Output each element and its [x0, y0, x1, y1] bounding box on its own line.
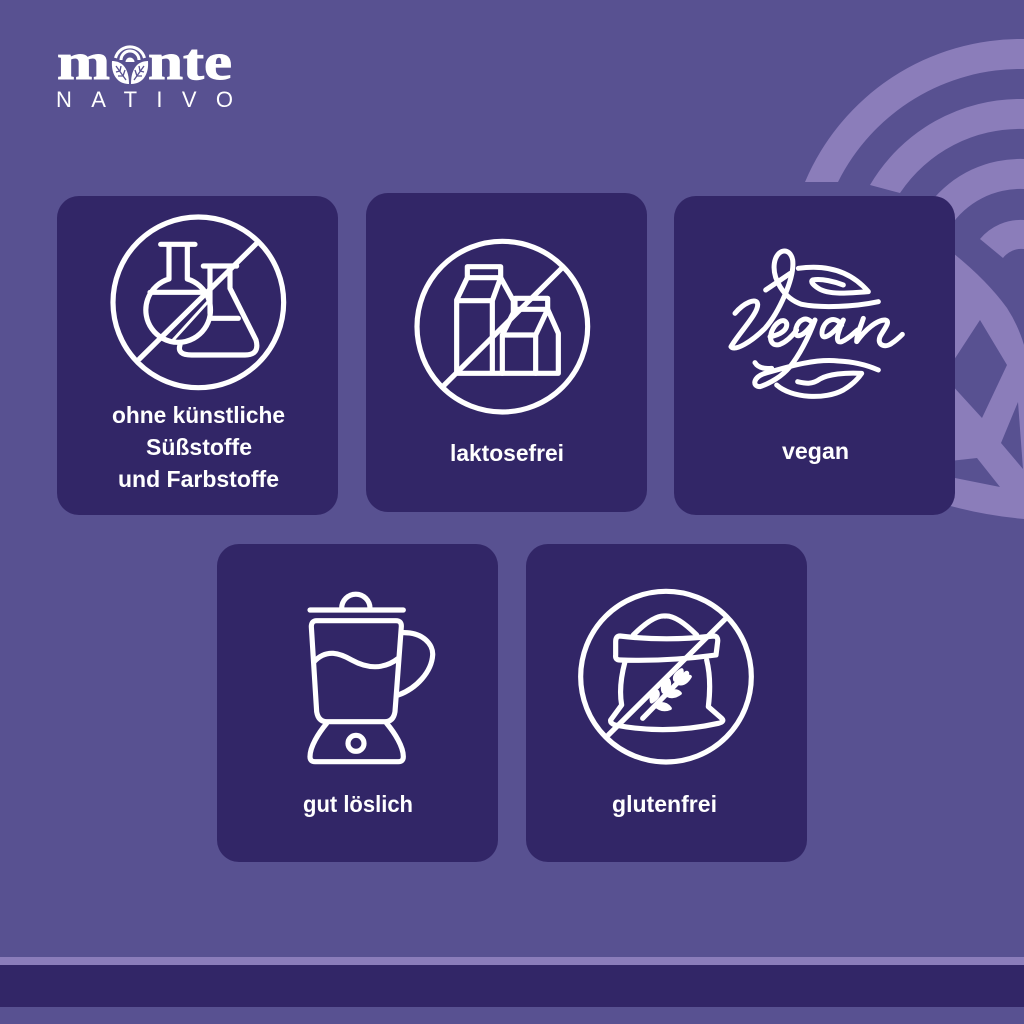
- panel: glutenfrei: [526, 544, 807, 862]
- panel: vegan: [674, 196, 955, 515]
- label: laktosefrei: laktosefrei: [450, 440, 564, 466]
- panel background: [366, 193, 647, 512]
- panel background: [57, 196, 338, 515]
- icon: crossed-out flasks: [113, 217, 284, 388]
- label: gut löslich: gut löslich: [303, 791, 413, 817]
- panel background: [526, 544, 807, 862]
- logo wordmark: nte: nte: [148, 34, 232, 91]
- panel: gut löslich: [217, 544, 498, 862]
- panel background: [674, 196, 955, 515]
- panel background: [217, 544, 498, 862]
- icon: blender: [310, 594, 433, 762]
- label: glutenfrei: glutenfrei: [612, 791, 717, 817]
- panel: ohne künstliche Süßstoffe und Farbstoffe: [57, 196, 338, 515]
- logo emblem: [112, 47, 148, 84]
- icon: crossed-out milk cartons: [417, 241, 588, 412]
- label: und Farbstoffe: und Farbstoffe: [118, 466, 279, 492]
- icon: vegan lettering with leaves: [731, 251, 902, 396]
- logo: monte nativo: [56, 34, 233, 112]
- background emblem watermark: [805, 39, 1024, 519]
- label: vegan: vegan: [782, 438, 849, 464]
- panel: laktosefrei: [366, 193, 647, 512]
- icon: crossed-out grain sack: [581, 591, 751, 762]
- logo wordmark: m: m: [57, 34, 110, 91]
- label: ohne künstliche: ohne künstliche: [112, 402, 285, 428]
- logo wordmark: NATIVO: NATIVO: [56, 87, 233, 112]
- label: Süßstoffe: Süßstoffe: [146, 434, 252, 460]
- footer bars: [0, 957, 1024, 1007]
